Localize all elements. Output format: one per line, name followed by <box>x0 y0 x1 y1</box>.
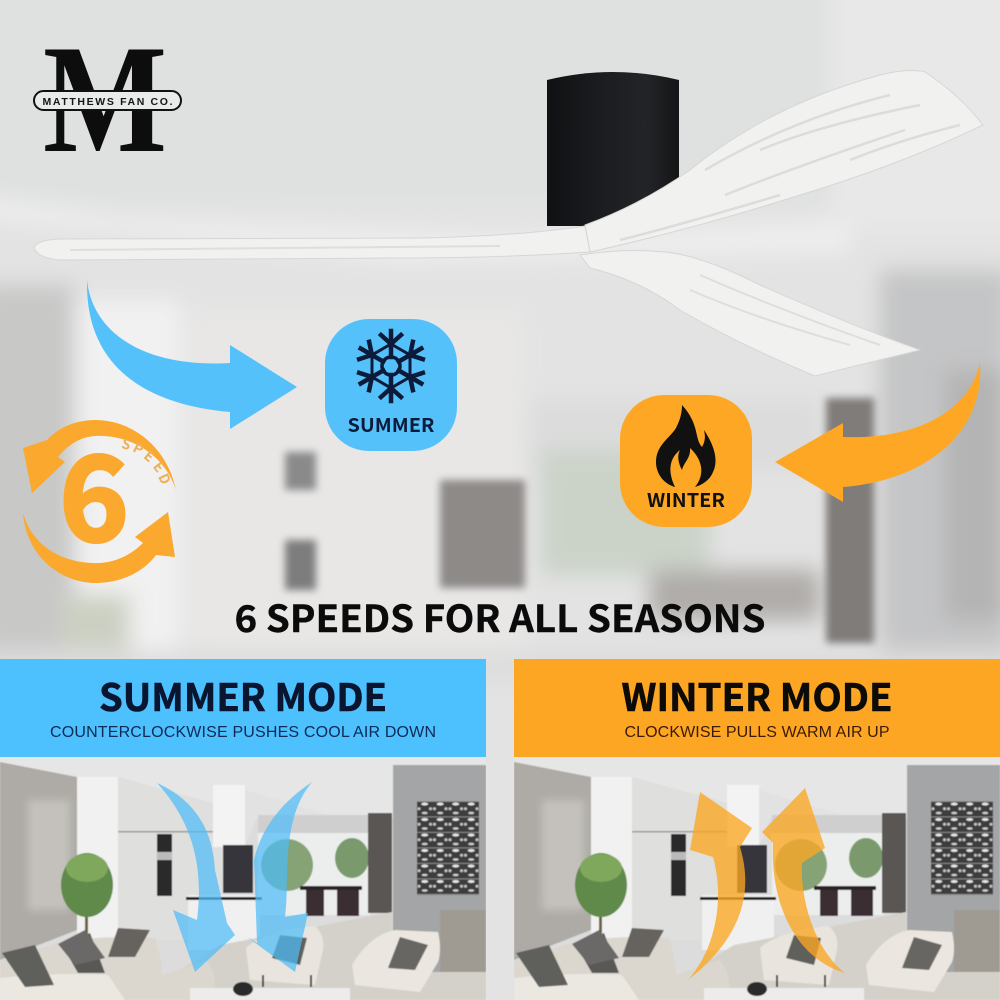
summer header: SUMMER MODE <box>99 667 387 722</box>
summer airflow arrows <box>157 782 312 972</box>
speed label <box>119 433 176 488</box>
winter label: WINTER <box>647 486 725 513</box>
fan blades <box>34 71 983 376</box>
fan motor housing <box>547 72 679 226</box>
panel: winter mode <box>514 659 1000 1000</box>
winter badge <box>620 395 752 527</box>
speed label: S <box>119 433 133 455</box>
heading: 6 SPEEDS FOR ALL SEASONS <box>234 589 766 643</box>
6 speed icon <box>23 404 176 583</box>
summer label: SUMMER <box>348 411 435 438</box>
summer badge <box>325 319 457 451</box>
speed label: P <box>130 438 147 460</box>
winter room photo <box>514 758 1000 1000</box>
speed label: E <box>139 446 159 467</box>
summer header: COUNTERCLOCKWISE PUSHES COOL AIR DOWN <box>50 724 436 741</box>
winter header: CLOCKWISE PULLS WARM AIR UP <box>624 724 890 741</box>
summer room photo <box>0 758 486 1000</box>
summer header <box>0 659 486 757</box>
bottom rotating arrow <box>23 512 175 583</box>
logo: Matthews Fan Co.: M <box>43 13 167 185</box>
speed label: E <box>148 457 169 476</box>
logo: Matthews Fan Co.: MATTHEWS FAN CO. <box>42 96 173 108</box>
winter airflow arrows <box>688 788 845 980</box>
panel: summer mode <box>0 659 486 1000</box>
ceiling fan <box>34 71 983 376</box>
icon: snowflake <box>356 331 426 401</box>
arrow: winter airflow <box>775 362 980 502</box>
arrow: summer airflow <box>87 280 297 429</box>
speed label: D <box>153 470 176 488</box>
number 6: 6 <box>59 404 129 575</box>
top rotating arrow <box>23 420 176 493</box>
winter header <box>514 659 1000 757</box>
winter header: WINTER MODE <box>622 667 892 722</box>
icon: flame <box>656 405 716 487</box>
